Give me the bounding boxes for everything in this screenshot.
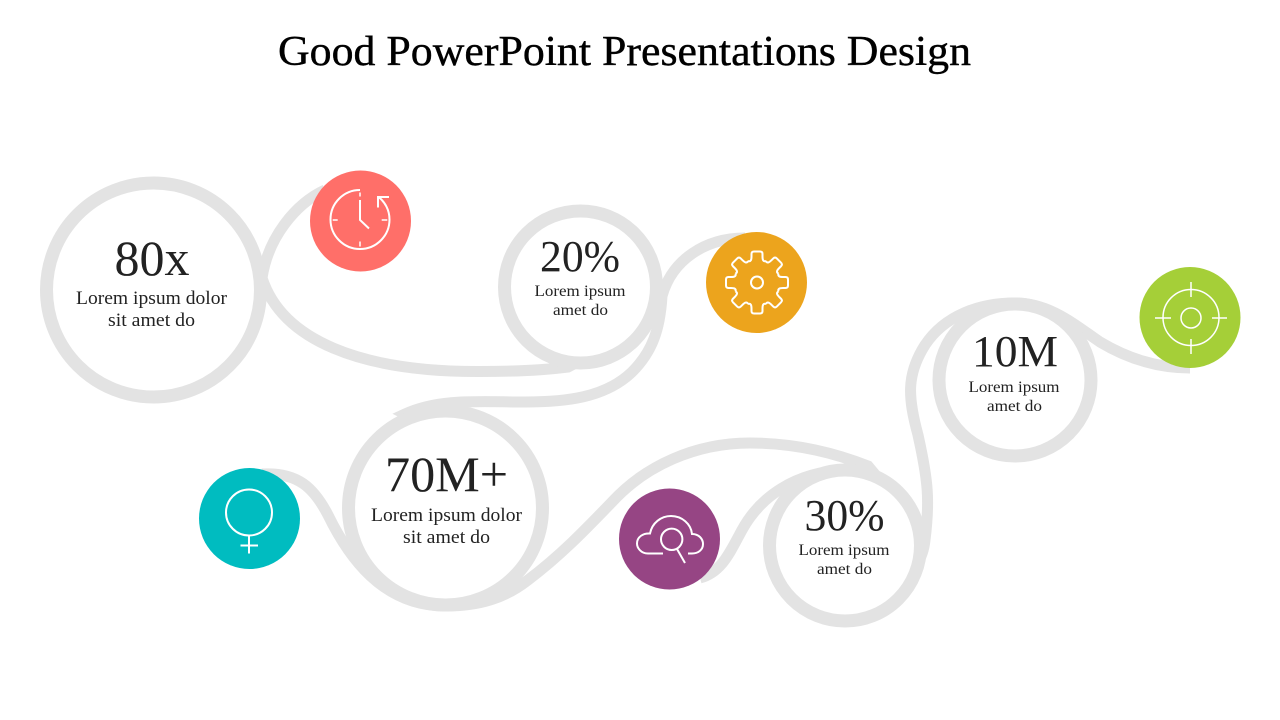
panel: 10M: 10M xyxy=(972,327,1058,376)
panel: 70M+ xyxy=(348,411,542,605)
icon: gear xyxy=(706,232,807,333)
panel: 70M+: 70M+ xyxy=(385,446,508,502)
panel: 30%: amet do xyxy=(817,561,872,578)
connector: 30% circle to green icon xyxy=(900,303,1190,572)
panel: 70M+: Lorem ipsum dolor xyxy=(371,505,523,526)
panel: 30% xyxy=(770,470,920,621)
connector: purple icon to 30% circle xyxy=(700,470,845,578)
connector: orange icon to 70M+ circle xyxy=(405,238,745,428)
title: Good PowerPoint Presentations Design xyxy=(278,29,971,75)
connector: teal icon to 30% circle xyxy=(262,443,888,606)
panel: 10M: amet do xyxy=(987,398,1042,415)
icon: female symbol xyxy=(199,468,300,569)
panel: 30%: Lorem ipsum xyxy=(798,542,890,559)
panel: 30%: 30% xyxy=(804,491,884,540)
panel: 20% xyxy=(504,211,656,363)
panel: 20%: amet do xyxy=(553,302,608,319)
icon: cloud search xyxy=(619,488,720,590)
panel: 10M xyxy=(939,304,1091,456)
panel: 80x: sit amet do xyxy=(108,310,195,331)
panel: 80x: Lorem ipsum dolor xyxy=(76,288,228,309)
panel: 80x: 80x xyxy=(114,230,190,286)
connector ribbon network xyxy=(262,190,1190,606)
panel: 20%: Lorem ipsum xyxy=(534,283,626,300)
panel: 10M: Lorem ipsum xyxy=(968,379,1060,396)
icon: clock with return arrow xyxy=(310,170,411,272)
connector: red icon to 20% circle xyxy=(262,190,600,372)
panel: 70M+: sit amet do xyxy=(403,527,490,548)
panel: 80x xyxy=(46,183,260,397)
icon: target crosshair xyxy=(1140,267,1240,368)
panel: 20%: 20% xyxy=(540,232,620,281)
